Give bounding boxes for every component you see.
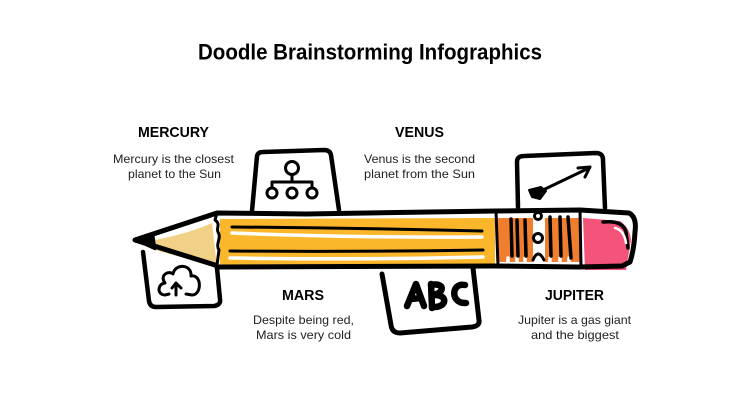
block: Venus	[364, 124, 475, 181]
block: Venus: VENUS	[395, 124, 444, 141]
block: Jupiter: and the biggest	[531, 328, 620, 342]
block: Mercury: planet to the Sun	[128, 167, 221, 181]
block: Mars	[253, 287, 354, 342]
title: Doodle Brainstorming Infographics	[198, 40, 542, 64]
block: Mercury	[113, 124, 235, 181]
tab: arrow icon	[517, 153, 605, 208]
icon: hierarchy	[267, 162, 317, 198]
tab: hierarchy icon	[252, 150, 339, 211]
icon: ABC lettering	[407, 284, 466, 308]
block: Venus: planet from the Sun	[364, 167, 475, 181]
block: Mars: Mars is very cold	[256, 328, 351, 342]
icon: arrow	[529, 167, 590, 199]
pencil eraser	[583, 218, 631, 270]
icon: cloud upload	[159, 266, 199, 295]
block: Mercury: MERCURY	[138, 124, 209, 141]
block: Mercury: Mercury is the closest	[113, 152, 235, 166]
pencil highlights	[230, 233, 483, 259]
block: Mars: Despite being red,	[253, 313, 354, 327]
block: Jupiter	[518, 287, 632, 342]
pencil body fill	[220, 218, 495, 267]
pencil ferrule	[498, 212, 580, 265]
block: Mars: MARS	[282, 287, 324, 304]
tab: ABC icon	[382, 268, 479, 333]
block: Jupiter: Jupiter is a gas giant	[518, 313, 632, 327]
pencil	[135, 210, 635, 270]
block: Venus: Venus is the second	[364, 152, 475, 166]
block: Jupiter: JUPITER	[545, 287, 604, 304]
pencil outline	[135, 210, 635, 267]
tab: cloud icon	[143, 252, 220, 307]
pencil wood cone	[155, 223, 217, 267]
